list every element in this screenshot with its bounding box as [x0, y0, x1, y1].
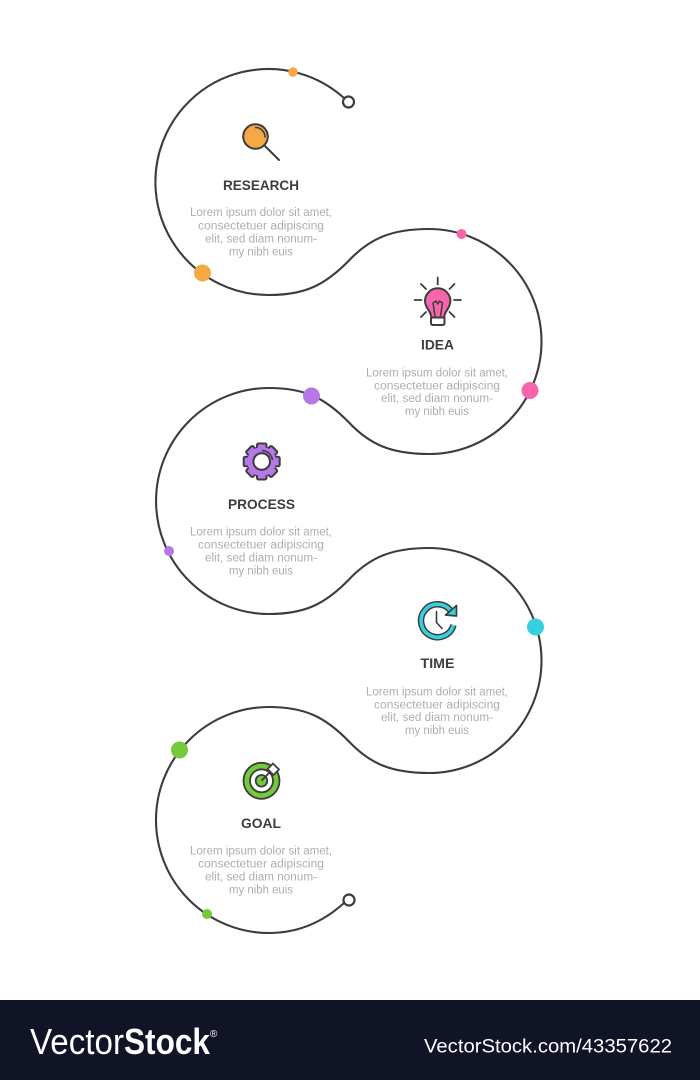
text: research: consectetuer adipiscing: [198, 220, 324, 232]
footer logo: Stock: [124, 1021, 211, 1062]
text: research: [190, 207, 332, 258]
heading: idea: IDEA: [421, 336, 454, 352]
text: research: elit, sed diam nonum-: [205, 234, 317, 246]
end node: [344, 894, 354, 906]
footer bar: [0, 1000, 700, 1080]
text: process: consectetuer adipiscing: [198, 540, 324, 552]
text: time: [366, 686, 508, 737]
text: goal: Lorem ipsum dolor sit amet,: [190, 846, 332, 858]
footer logo: [30, 1021, 218, 1062]
icon: clock with arrow: [421, 604, 456, 637]
footer logo: ®: [210, 1029, 218, 1040]
text: idea: Lorem ipsum dolor sit amet,: [366, 368, 508, 380]
winding path line: [155, 69, 542, 933]
text: time: Lorem ipsum dolor sit amet,: [366, 686, 508, 698]
icon: target: [244, 763, 280, 799]
text: goal: my nibh euis: [229, 884, 293, 896]
text: goal: [190, 846, 332, 896]
text: process: [190, 526, 332, 578]
text: process: elit, sed diam nonum-: [205, 552, 317, 564]
dots: process: [164, 388, 320, 556]
text: idea: [366, 368, 508, 418]
text: process: my nibh euis: [229, 566, 293, 578]
dots: goal: [171, 742, 212, 919]
start node: [343, 96, 354, 108]
text: goal: elit, sed diam nonum-: [205, 872, 317, 884]
text: goal: consectetuer adipiscing: [198, 858, 324, 870]
icon: light bulb: [414, 278, 461, 325]
text: research: my nibh euis: [229, 246, 293, 258]
heading: process: PROCESS: [228, 496, 295, 512]
dot: time: [527, 618, 544, 636]
text: time: my nibh euis: [405, 725, 469, 737]
footer logo: Vector: [30, 1021, 124, 1062]
text: idea: elit, sed diam nonum-: [381, 393, 493, 405]
heading: time: TIME: [420, 655, 454, 671]
heading: research: RESEARCH: [223, 177, 299, 193]
heading: goal: GOAL: [241, 815, 281, 831]
text: research: Lorem ipsum dolor sit amet,: [190, 207, 332, 219]
text: time: consectetuer adipiscing: [374, 700, 500, 712]
icon: magnifying glass: [243, 124, 279, 160]
dots: idea: [456, 229, 538, 399]
text: time: elit, sed diam nonum-: [381, 712, 493, 724]
footer id text: VectorStock.com/43357622: [424, 1036, 672, 1058]
text: idea: my nibh euis: [405, 406, 469, 418]
icon: gear: [244, 444, 280, 480]
text: process: Lorem ipsum dolor sit amet,: [190, 526, 332, 538]
dots: research: [194, 67, 298, 282]
text: idea: consectetuer adipiscing: [374, 380, 500, 392]
